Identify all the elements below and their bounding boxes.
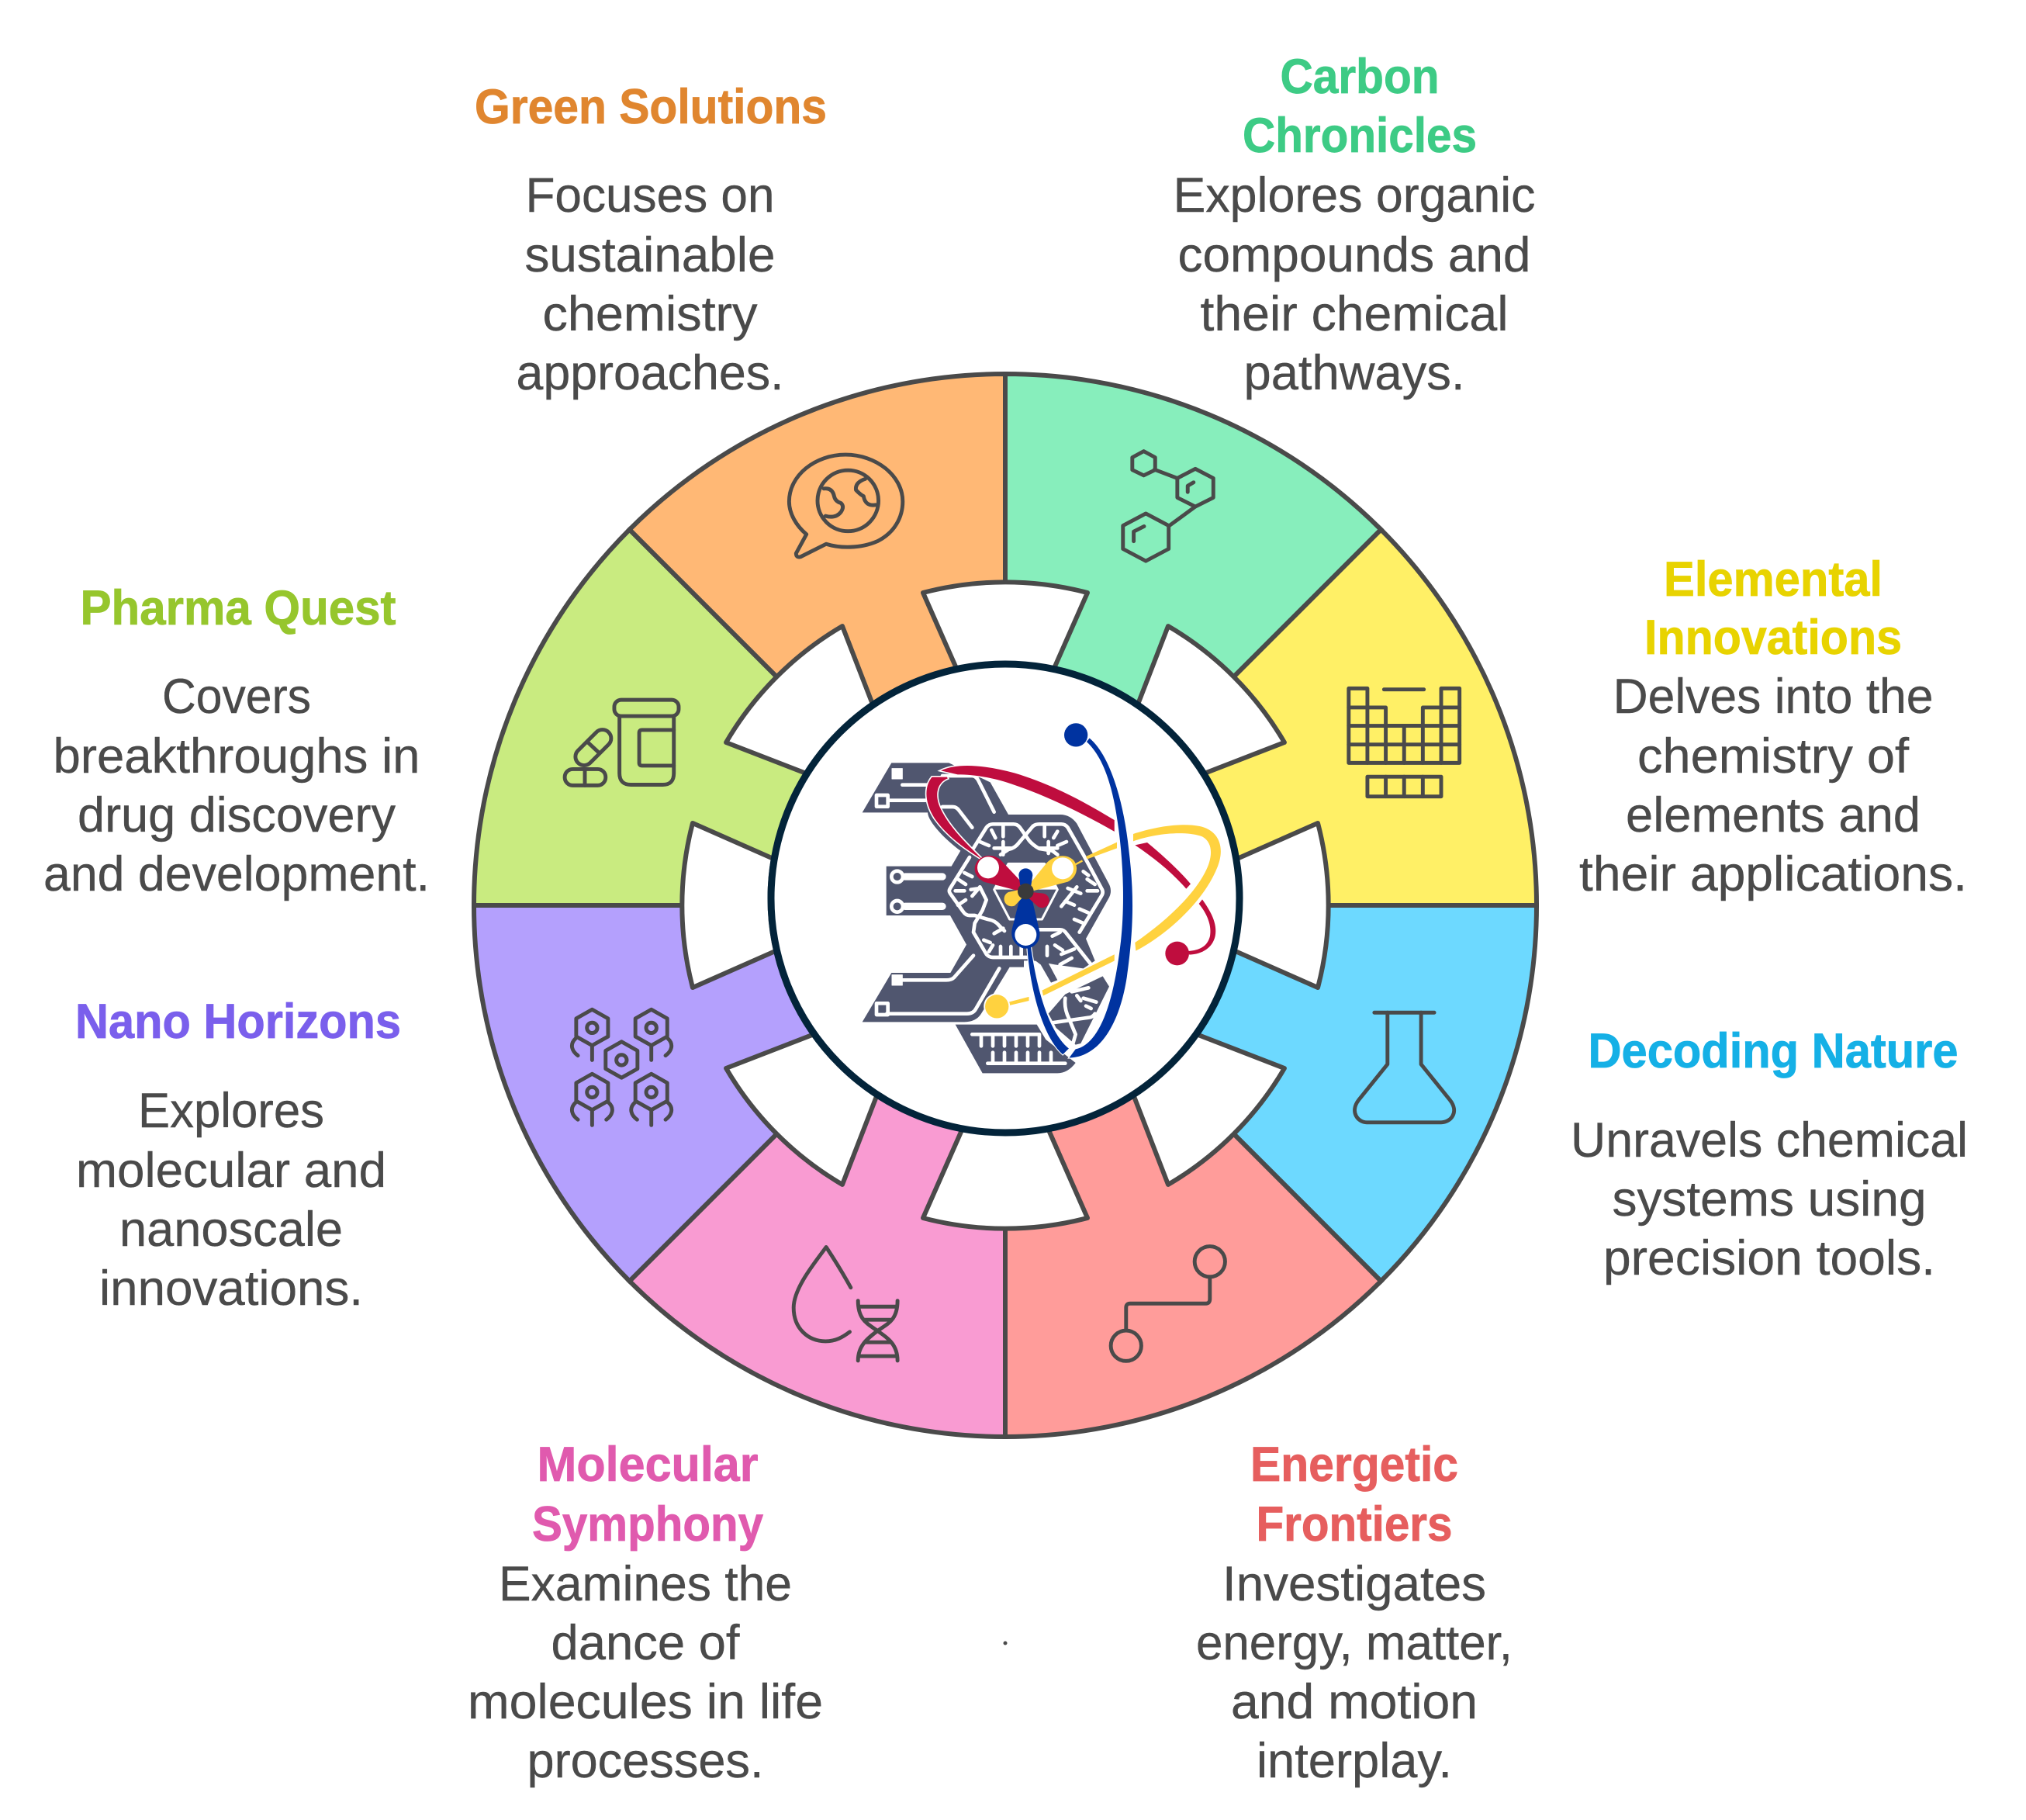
- description: Explores: [138, 1084, 324, 1138]
- heading: Innovations: [1644, 611, 1902, 665]
- heading: Elemental: [1664, 552, 1883, 607]
- heading: [1644, 552, 1902, 665]
- description: Explores organic: [1173, 168, 1536, 223]
- petals and nucleus: [975, 856, 1077, 949]
- description: Examines the: [499, 1557, 792, 1611]
- description: energy, matter,: [1196, 1616, 1513, 1670]
- text block: Decoding Nature: [1571, 1024, 1968, 1285]
- description: innovations.: [99, 1261, 363, 1316]
- icon: pill jar: [565, 700, 679, 785]
- wheel sector: Green Solutions: [630, 374, 1005, 905]
- yellow and red orbit right side: [1072, 825, 1221, 965]
- wheel sector: Decoding Nature: [1005, 905, 1537, 1281]
- heading: Energetic: [1250, 1438, 1458, 1492]
- heading: Chronicles: [1243, 109, 1477, 163]
- description: elements and: [1626, 788, 1921, 843]
- icon: nano hexagon robots: [572, 1009, 672, 1125]
- description: Unravels chemical: [1571, 1113, 1968, 1168]
- description: and motion: [1231, 1675, 1478, 1729]
- description: sustainable: [524, 228, 776, 282]
- description: molecules in life: [468, 1675, 823, 1729]
- heading: Symphony: [532, 1497, 763, 1552]
- description: pathways.: [1244, 346, 1464, 400]
- heading: [532, 1438, 763, 1552]
- icon: periodic table: [1349, 688, 1460, 797]
- wheel sector: Carbon Chronicles: [1005, 374, 1381, 905]
- heading: Decoding Nature: [1589, 1024, 1958, 1078]
- text block: Carbon Chronicles: [1173, 50, 1536, 400]
- description: [43, 670, 430, 901]
- wheel sector: Nano Horizons: [474, 905, 1005, 1281]
- description: Focuses on: [526, 168, 774, 223]
- centre triangle window: [994, 863, 1057, 919]
- heading: Pharma Quest: [81, 581, 396, 635]
- description: [468, 1557, 823, 1788]
- description: interplay.: [1257, 1734, 1452, 1788]
- wheel sector: Molecular Symphony: [630, 905, 1005, 1437]
- heading: [1250, 1438, 1458, 1552]
- description: Investigates: [1222, 1557, 1486, 1611]
- icon: speech bubble with globe: [789, 455, 903, 557]
- circuit board body: [863, 763, 1111, 1073]
- description: Delves into the: [1613, 670, 1933, 724]
- description: [1196, 1557, 1513, 1788]
- yellow orbit left side and ball: [985, 954, 1115, 1018]
- heading: Nano Horizons: [75, 995, 401, 1049]
- text block: Molecular Symphony: [468, 1438, 823, 1788]
- description: their applications.: [1579, 847, 1967, 901]
- description: their chemical: [1201, 287, 1508, 341]
- icon: flask: [1355, 1012, 1454, 1123]
- description: breakthroughs in: [53, 729, 420, 784]
- text block: Green Solutions: [475, 80, 827, 400]
- heading: Green Solutions: [475, 80, 827, 134]
- description: compounds and: [1177, 228, 1531, 282]
- icon: drop and DNA: [793, 1247, 897, 1361]
- central hub circle: [769, 664, 1239, 1134]
- description: [1579, 670, 1967, 901]
- text block: Energetic Frontiers: [1196, 1438, 1513, 1788]
- red orbit: [926, 766, 1115, 860]
- description: [76, 1084, 386, 1316]
- text block: Nano Horizons: [75, 995, 401, 1316]
- white notches between the wheel and the hub: [682, 582, 1329, 1229]
- wheel sector: Energetic Frontiers: [1005, 905, 1381, 1437]
- heading: Molecular: [537, 1438, 759, 1492]
- text block: Elemental Innovations: [1579, 552, 1967, 901]
- icon: molecule hexagons: [1123, 452, 1213, 561]
- description: approaches.: [517, 346, 783, 400]
- description: molecular and: [76, 1144, 386, 1198]
- description: [517, 168, 783, 400]
- description: [1173, 168, 1536, 400]
- text block: Pharma Quest: [43, 581, 430, 901]
- description: processes.: [527, 1734, 763, 1788]
- description: systems using: [1612, 1172, 1927, 1227]
- description: dance of: [551, 1616, 740, 1670]
- heading: [1243, 50, 1477, 163]
- description: Covers: [162, 670, 311, 724]
- description: chemistry of: [1637, 729, 1909, 784]
- blue orbit: [1027, 723, 1132, 1057]
- heading: Frontiers: [1257, 1497, 1452, 1552]
- description: [1571, 1113, 1968, 1285]
- wheel sector: Elemental Innovations: [1005, 530, 1537, 905]
- circuit traces and hexagon cells: [876, 769, 1103, 1064]
- description: drug discovery: [78, 788, 396, 843]
- description: precision tools.: [1603, 1231, 1935, 1285]
- description: and development.: [43, 847, 430, 901]
- central emblem: circuit hexagons and atom orbits: [863, 723, 1221, 1073]
- small dot: [1004, 1642, 1007, 1645]
- description: nanoscale: [119, 1202, 343, 1257]
- icon: circuit path: [1111, 1247, 1225, 1361]
- wheel sector: Pharma Quest: [474, 530, 1005, 905]
- description: chemistry: [543, 287, 758, 341]
- heading: Carbon: [1280, 50, 1440, 104]
